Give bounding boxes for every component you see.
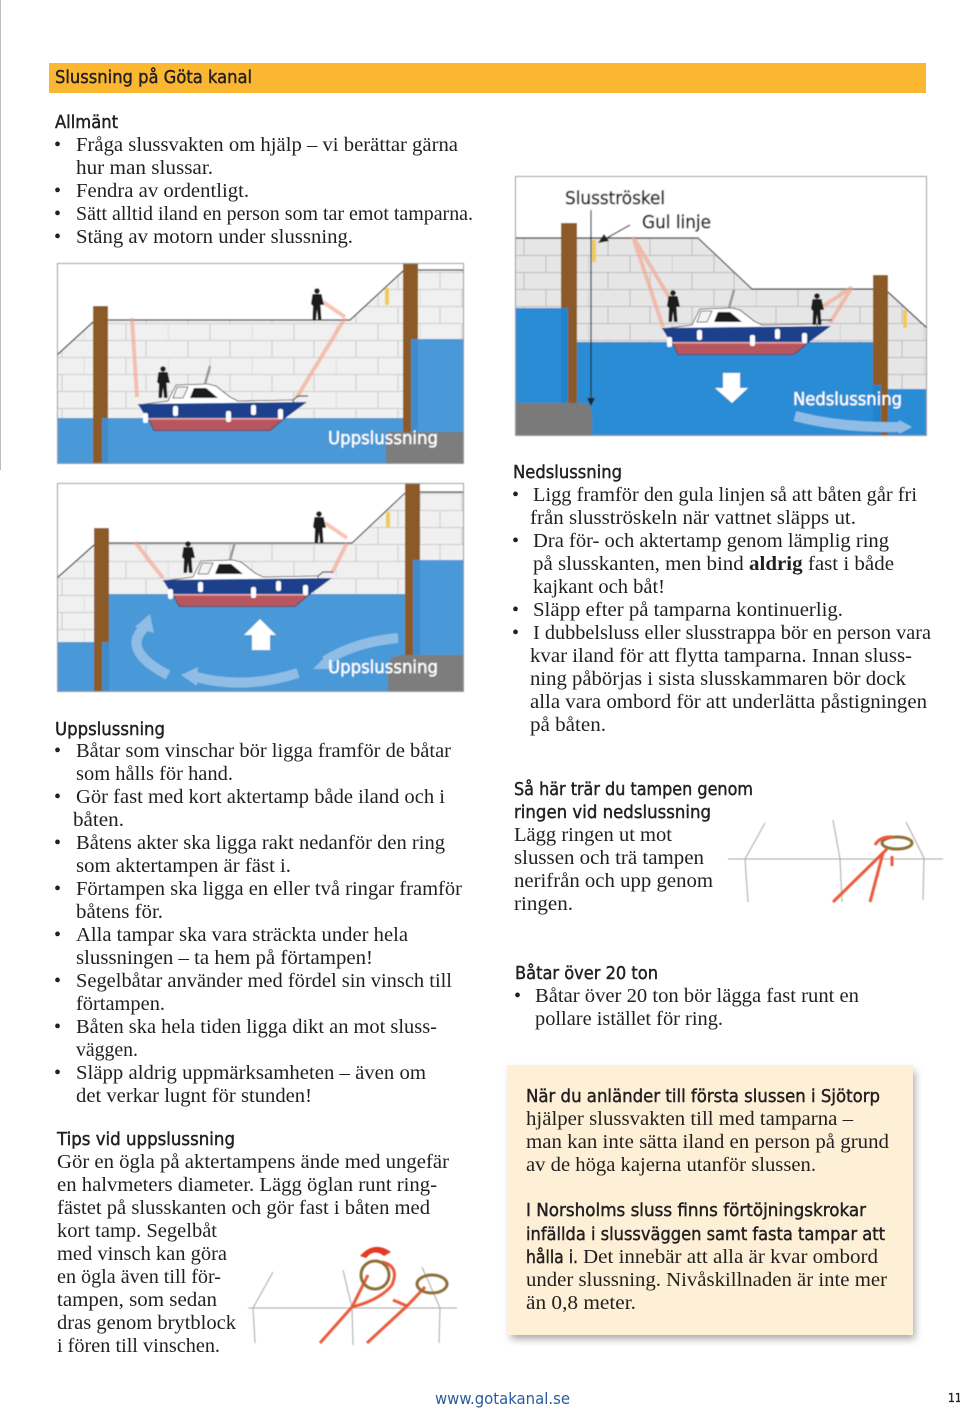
text block: Tips vid uppslussning: kort tamp. Segelbåt (57, 1220, 217, 1242)
text block: Nedslussning: från slusströskeln när vattnet släpps ut. (530, 507, 856, 529)
sketch: loop on ring, uppslussning (248, 1247, 457, 1345)
text block: Uppslussning: slussningen – ta hem på förtampen! (76, 947, 373, 969)
text block: Uppslussning: väggen. (76, 1039, 138, 1061)
text block: Allmänt: • (54, 203, 61, 225)
text block: Tips vid uppslussning: tampen, som sedan (57, 1289, 217, 1311)
text block: Båtar över 20 ton: • (514, 985, 521, 1007)
text block: Uppslussning: • (54, 740, 61, 762)
footer: website: www.gotakanal.se (435, 1389, 570, 1408)
text block: Tips vid uppslussning: Tips vid uppslussning (56, 1130, 235, 1150)
text block: Nedslussning: • (512, 484, 519, 506)
callout: Sjötorp and Norsholm: hjälper slussvakten till med tamparna – (526, 1108, 854, 1130)
text block: Uppslussning: båten. (73, 809, 124, 831)
text block: Så här trär du tampen: Så här trär du tampen genom (514, 779, 753, 800)
text block: Uppslussning: Släpp aldrig uppmärksamheten – även om (76, 1062, 426, 1084)
text block: Allmänt (54, 113, 473, 248)
sketch: threading rope, nedslussning (728, 820, 943, 902)
label: Nedslussning: Nedslussning (793, 389, 902, 410)
text block: Tips vid uppslussning (56, 1130, 449, 1357)
text block: Uppslussning (54, 720, 462, 1107)
arrow: to yellow line (598, 225, 630, 243)
text block: Allmänt: • (54, 226, 61, 248)
title bar: Slussning på Göta kanal (55, 67, 252, 88)
text block: Uppslussning: Förtampen ska ligga en eller två ringar framför (76, 878, 462, 900)
icon: boat (138, 366, 308, 430)
callout: Sjötorp and Norsholm: hålla i. (526, 1247, 578, 1268)
label: Uppslussning: Uppslussning (328, 428, 438, 449)
text block: Nedslussning: I dubbelsluss eller slusstrappa bör en person vara (533, 622, 931, 644)
left page edge line (0, 0, 1, 470)
text block: Uppslussning: Gör fast med kort aktertamp både iland och i (76, 786, 445, 808)
label: Gul linje: Gul linje (642, 213, 711, 233)
text block: Tips vid uppslussning: med vinsch kan göra (57, 1243, 227, 1265)
text block: Allmänt: Fråga slussvakten om hjälp – vi berättar gärna (76, 134, 458, 156)
callout: Sjötorp and Norsholm: När du anländer till första slussen i Sjötorp (526, 1087, 880, 1107)
text block: Så här trär du tampen: nerifrån och upp genom (514, 870, 713, 892)
text block: Uppslussning: Båtens akter ska ligga rakt nedanför den ring (76, 832, 445, 854)
text block: Uppslussning: båtens för. (76, 901, 163, 923)
text block: Nedslussning: Nedslussning (513, 463, 622, 483)
text block: Nedslussning: • (512, 622, 519, 644)
text block: Uppslussning: Båtar som vinschar bör ligga framför de båtar (76, 740, 451, 762)
text block: Allmänt: • (54, 134, 61, 156)
text block: Nedslussning: Släpp efter på tamparna kontinuerlig. (533, 599, 843, 621)
arrow: water rising (244, 619, 276, 650)
diagram: Uppslussning, lock before filling (57, 263, 464, 464)
text block: Uppslussning: Alla tampar ska vara sträckta under hela (76, 924, 408, 946)
text block: Uppslussning: förtampen. (76, 993, 165, 1015)
text block: Nedslussning (512, 463, 931, 736)
text block: Så här trär du tampen: Lägg ringen ut mot (514, 824, 672, 846)
text block: Uppslussning: Uppslussning (55, 720, 165, 740)
text block: Så här trär du tampen (514, 779, 753, 915)
text block: Allmänt: • (54, 180, 61, 202)
text block: Uppslussning: Båten ska hela tiden ligga dikt an mot sluss- (76, 1016, 437, 1038)
text block: Tips vid uppslussning: dras genom brytblock (57, 1312, 236, 1334)
text block: Så här trär du tampen: ringen vid nedslussning (514, 803, 711, 823)
icon: person at stern (667, 290, 680, 322)
arrow: water current (135, 614, 398, 686)
arrow: threshold line (587, 210, 595, 406)
text block: Uppslussning: • (54, 1062, 61, 1084)
text block: Nedslussning: Ligg framför den gula linjen så att båten går fri (533, 484, 917, 506)
text block: Nedslussning: • (512, 530, 519, 552)
callout: Sjötorp and Norsholm: än 0,8 meter. (526, 1292, 636, 1314)
arrow: water current (795, 416, 912, 434)
text block: Allmänt: Allmänt (55, 113, 118, 133)
callout: Sjötorp and Norsholm: man kan inte sätta iland en person på grund (526, 1131, 889, 1153)
icon: person on boat (157, 366, 170, 398)
text block: Uppslussning: som hålls för hand. (76, 763, 233, 785)
label: Uppslussning: Uppslussning (328, 657, 438, 678)
text block: Allmänt: Sätt alltid iland en person som tar emot tamparna. (76, 203, 473, 225)
arrow: water falling (715, 373, 748, 403)
rope: bow and stern lines (135, 523, 347, 578)
text block: Nedslussning: ning påbörjas i sista slusskammaren bör dock (530, 668, 906, 690)
rope: bow and stern lines (633, 237, 852, 327)
text block: Nedslussning: kajkant och båt! (533, 576, 665, 598)
text block: Båtar över 20 ton (514, 963, 859, 1030)
text block: Allmänt: hur man slussar. (76, 157, 213, 179)
text block: Tips vid uppslussning: en halvmeters diameter. Lägg öglan runt ring- (57, 1174, 437, 1196)
title bar (49, 63, 926, 93)
diagram: Nedslussning (515, 176, 927, 436)
text block: Båtar över 20 ton: pollare istället för ring. (535, 1008, 723, 1030)
label: Slusströskel: Slusströskel (565, 189, 665, 209)
text block: Uppslussning: • (54, 878, 61, 900)
callout: Sjötorp and Norsholm: Det innebär att alla är kvar ombord (583, 1246, 878, 1268)
diagram: Uppslussning, lock filling (57, 483, 464, 692)
text block: Uppslussning: som aktertampen är fäst i. (76, 855, 291, 877)
callout: Sjötorp and Norsholm: under slussning. Nivåskillnaden är inte mer (526, 1269, 887, 1291)
text block: Allmänt: Stäng av motorn under slussning. (76, 226, 353, 248)
callout: Sjötorp and Norsholm (507, 1065, 915, 1339)
callout: Sjötorp and Norsholm: I Norsholms sluss finns förtöjningskrokar (526, 1201, 867, 1221)
callout: Sjötorp and Norsholm: av de höga kajerna utanför slussen. (526, 1154, 816, 1176)
icon: person at bow (811, 293, 824, 325)
text block: Nedslussning: på båten. (530, 714, 606, 736)
icon: person on boat (182, 541, 195, 573)
icon: person on lock edge (313, 511, 326, 543)
text block: Nedslussning: kvar iland för att flytta tamparna. Innan sluss- (530, 645, 912, 667)
text block: Båtar över 20 ton: Båtar över 20 ton bör lägga fast runt en (535, 985, 859, 1007)
text block: Uppslussning: • (54, 1016, 61, 1038)
text block: Uppslussning: Segelbåtar använder med fördel sin vinsch till (76, 970, 452, 992)
text block: Båtar över 20 ton: Båtar över 20 ton (515, 963, 658, 984)
text block: Så här trär du tampen: slussen och trä tampen (514, 847, 704, 869)
icon: boat (163, 542, 333, 606)
text block: Tips vid uppslussning: Gör en ögla på aktertampens ände med ungefär (57, 1151, 449, 1173)
text block: Tips vid uppslussning: i fören till vinschen. (57, 1335, 220, 1357)
text block: Tips vid uppslussning: fästet på slusskanten och gör fast i båten med (57, 1197, 430, 1219)
text block: Uppslussning: det verkar lugnt för stunden! (76, 1085, 312, 1107)
text block: Uppslussning: • (54, 970, 61, 992)
rope: bow and stern lines (132, 302, 345, 397)
text block: Nedslussning: alla vara ombord för att underlätta påstigningen (530, 691, 927, 713)
text block: Uppslussning: • (54, 924, 61, 946)
text block: Uppslussning: • (54, 786, 61, 808)
text block: Nedslussning: Dra för- och aktertamp genom lämplig ring (533, 530, 889, 552)
text block: Nedslussning: på slusskanten, men bind aldrig fast i både (533, 553, 894, 575)
text block: Tips vid uppslussning: en ögla även till för- (57, 1266, 221, 1288)
text block: Allmänt: Fendra av ordentligt. (76, 180, 249, 202)
callout: Sjötorp and Norsholm: infällda i slussväggen samt fasta tampar att (526, 1225, 885, 1245)
text block: Uppslussning: • (54, 832, 61, 854)
icon: person on lock edge (311, 288, 324, 320)
text block: Nedslussning: • (512, 599, 519, 621)
text block: Så här trär du tampen: ringen. (514, 893, 573, 915)
icon: boat (662, 290, 832, 354)
